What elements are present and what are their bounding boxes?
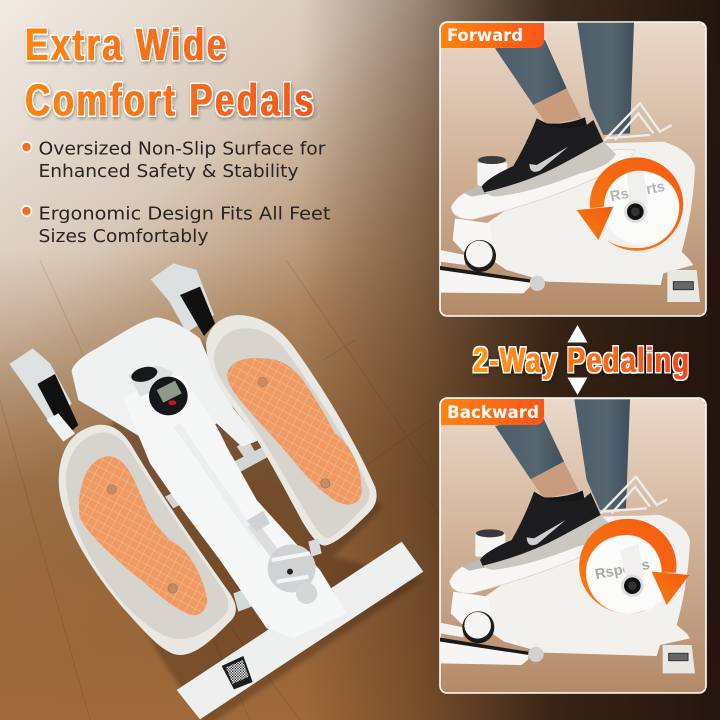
product photo: stepper from above bbox=[9, 263, 423, 720]
feature bullet: ergonomic design: Sizes Comfortably bbox=[38, 226, 209, 247]
rear leg bbox=[577, 23, 634, 135]
backward arrow bbox=[579, 519, 689, 614]
foot pedal end bbox=[663, 645, 695, 673]
left rear arm bbox=[9, 348, 78, 442]
forward panel background bbox=[440, 22, 706, 316]
side rails bbox=[440, 250, 530, 293]
flywheel disk bbox=[603, 168, 680, 245]
flywheel disk: Rsports bbox=[594, 557, 651, 583]
pedal bbox=[451, 149, 634, 219]
tab: backward bbox=[441, 399, 544, 425]
pedal bbox=[449, 523, 631, 593]
housing bbox=[485, 515, 690, 656]
adjustment bolts bbox=[233, 538, 322, 612]
tab: forward bbox=[441, 23, 544, 48]
feature bullet: ergonomic design bbox=[22, 204, 330, 247]
up arrow bbox=[568, 325, 588, 342]
crank handle bbox=[247, 511, 317, 604]
console bbox=[477, 156, 507, 186]
bottle holder bbox=[604, 103, 672, 141]
leg and shoe bbox=[482, 40, 616, 197]
down arrow bbox=[568, 378, 588, 395]
backward panel background bbox=[440, 398, 706, 693]
flywheel disk bbox=[587, 529, 673, 614]
bottle holder bbox=[601, 477, 667, 513]
flywheel disk: Rsports bbox=[609, 179, 666, 205]
title bbox=[25, 19, 314, 126]
console bbox=[475, 529, 505, 557]
feature bullet: non-slip surface: Oversized Non-Slip Surface for bbox=[38, 138, 326, 160]
wheel bracket bbox=[451, 592, 544, 662]
rear housing bbox=[72, 317, 260, 457]
leg and shoe bbox=[480, 417, 613, 570]
console display bbox=[128, 364, 188, 415]
heading: 2-way pedaling: 2-Way Pedaling bbox=[473, 341, 689, 380]
floor stabilizer bar bbox=[177, 542, 423, 719]
feature bullet: ergonomic design: Ergonomic Design Fits All Feet bbox=[38, 204, 330, 224]
crossbars bbox=[165, 440, 268, 508]
right pedal bbox=[206, 315, 377, 546]
stepper with leg, backward view bbox=[440, 399, 695, 673]
feature bullet: non-slip surface bbox=[22, 138, 326, 182]
rear leg bbox=[574, 399, 630, 510]
wheel bracket bbox=[453, 218, 545, 291]
feature bullet: non-slip surface: Enhanced Safety & Stability bbox=[38, 161, 299, 182]
title: Comfort Pedals bbox=[25, 74, 314, 126]
housing bbox=[487, 142, 695, 285]
stepper with leg, forward view bbox=[440, 23, 700, 302]
panel: backward bbox=[440, 398, 706, 693]
left pedal bbox=[59, 425, 236, 655]
center beam bbox=[123, 375, 347, 638]
QR code bbox=[222, 656, 253, 689]
panel: forward bbox=[440, 22, 706, 316]
foot pedal end bbox=[667, 270, 700, 302]
tab: backward: Backward bbox=[447, 403, 539, 423]
side rails bbox=[440, 623, 528, 665]
title: Extra Wide bbox=[25, 19, 226, 70]
heading: 2-way pedaling bbox=[473, 325, 689, 395]
tab: forward: Forward bbox=[447, 26, 523, 46]
forward arrow bbox=[577, 157, 683, 251]
right rear arm bbox=[151, 263, 215, 336]
